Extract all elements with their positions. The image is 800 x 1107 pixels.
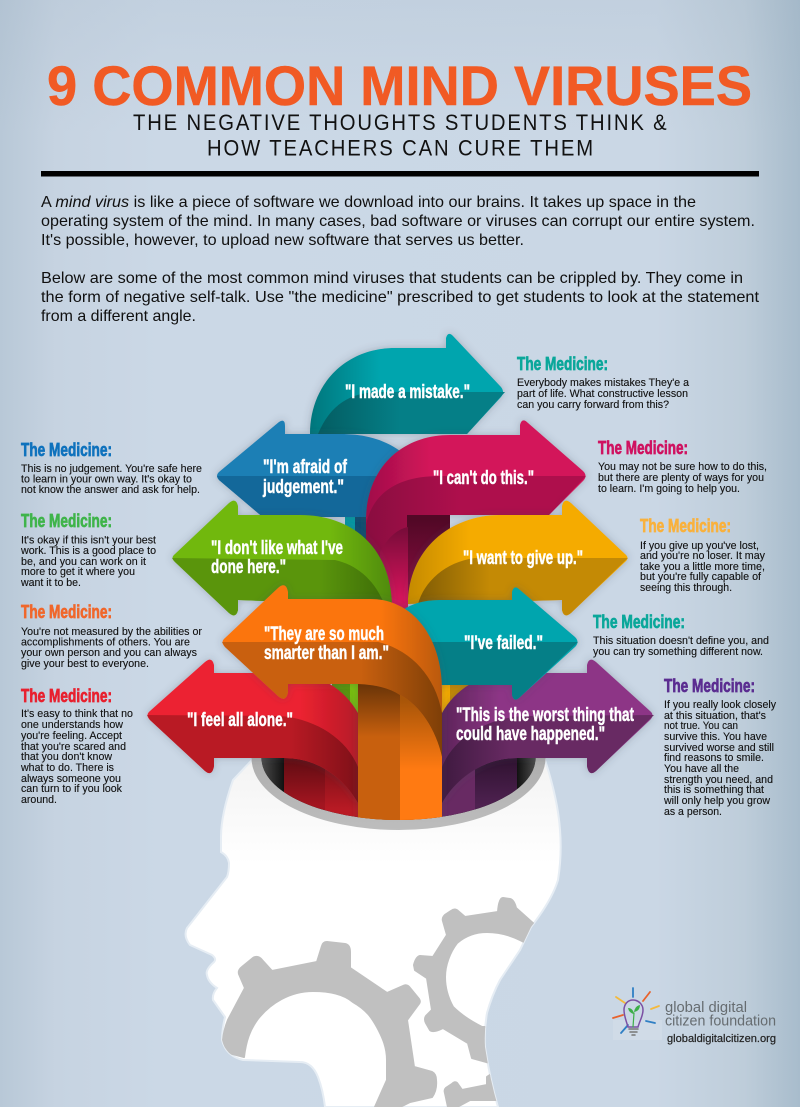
intro text block: A mind virus is like a piece of software we download into our brains. It takes up space in the xyxy=(41,194,696,211)
intro text block: operating system of the mind. In many cases, bad software or viruses can corrupt our entire system. xyxy=(41,213,755,230)
arrow: I feel all alone xyxy=(147,660,358,822)
medicine: This is the worst thing: survived worse and still xyxy=(664,742,774,754)
medicine: I feel all alone: you're feeling. Accept xyxy=(21,730,122,742)
medicine: This is the worst thing: strength you need, and xyxy=(664,774,773,786)
medicine: I can't do this: to learn. I'm going to help you. xyxy=(598,483,740,495)
arrow: I don't like what I've done here xyxy=(172,501,392,715)
medicine: I want to give up xyxy=(640,515,766,594)
medicine: I made a mistake: part of life. What constructive lesson xyxy=(517,388,688,400)
arrow: I want to give up xyxy=(408,501,628,715)
medicine: I can't do this: but there are plenty of ways for you xyxy=(598,472,764,484)
medicine: I'm afraid of judgement: This is no judgement. You're safe here xyxy=(21,463,202,475)
arrow: I'm afraid of judgement: judgement." xyxy=(262,477,344,498)
medicine: I feel all alone: one understands how xyxy=(21,719,123,731)
medicine: I made a mistake: Everybody makes mistakes They'e a xyxy=(517,377,689,389)
intro text block: Below are some of the most common mind viruses that students can be crippled by. They come in xyxy=(41,270,743,287)
medicine: I can't do this: The Medicine: xyxy=(598,437,688,458)
arrow: This is the worst thing: "This is the worst thing that xyxy=(456,705,634,726)
icon: upper gear xyxy=(414,898,535,1063)
arrow: They are so much smarter than I am: smarter than I am." xyxy=(264,643,389,664)
medicine: I'm afraid of judgement xyxy=(21,439,202,496)
medicine: I feel all alone: always someone you xyxy=(21,773,121,785)
arrow: I feel all alone: "I feel all alone." xyxy=(187,710,293,731)
medicine: This is the worst thing: as a person. xyxy=(664,806,722,818)
medicine: This is the worst thing: not true. You can xyxy=(664,720,738,732)
medicine: I don't like what I've done here: It's okay if this isn't your best xyxy=(21,535,156,547)
icon: large gear xyxy=(223,942,436,1107)
medicine: This is the worst thing: will only help you grow xyxy=(663,795,770,807)
medicine: This is the worst thing: You have all the xyxy=(664,763,739,775)
medicine: They are so much smarter: your own person and you can always xyxy=(21,647,197,659)
medicine: I'm afraid of judgement: to learn in your own way. It's okay to xyxy=(21,474,192,486)
medicine: I can't do this: You may not be sure how to do this, xyxy=(598,461,767,473)
medicine: I want to give up: seeing this through. xyxy=(640,582,732,594)
arrow: They are so much smarter than I am xyxy=(222,585,442,825)
medicine: I feel all alone: can turn to if you look xyxy=(21,783,123,795)
arrow: I'm afraid of judgement: "I'm afraid of xyxy=(263,457,347,478)
intro text block: It's possible, however, to upload new software that serves us better. xyxy=(41,232,524,249)
medicine: I feel all alone: It's easy to think that no xyxy=(21,708,133,720)
arrow: I've failed xyxy=(400,587,578,700)
medicine: I don't like what I've done here: The Medicine: xyxy=(21,510,112,531)
arrow: This is the worst thing xyxy=(442,660,654,822)
subtitle: HOW TEACHERS CAN CURE THEM xyxy=(207,136,593,161)
medicine: I want to give up: but you're fully capable of xyxy=(640,571,761,583)
medicine: This is the worst thing: at this situation, that's xyxy=(664,710,766,722)
arrow: I can't do this: "I can't do this." xyxy=(433,468,534,489)
medicine: This is the worst thing: this is something that xyxy=(664,784,764,796)
medicine: I can't do this xyxy=(598,437,767,495)
medicine: I want to give up: and you're no loser. It may xyxy=(640,550,766,562)
medicine: I want to give up: The Medicine: xyxy=(640,515,731,536)
medicine: I made a mistake: can you carry forward from this? xyxy=(517,399,669,411)
intro text block xyxy=(41,194,760,325)
medicine: They are so much smarter: You're not measured by the abilities or xyxy=(21,626,202,638)
medicine: I don't like what I've done here: want it to be. xyxy=(20,577,81,589)
medicine: I want to give up: take you a little more time, xyxy=(640,561,765,573)
medicine: I've failed: you can try something different now. xyxy=(593,646,763,658)
intro text block: from a different angle. xyxy=(41,308,196,325)
medicine: I made a mistake xyxy=(517,353,689,411)
subtitle: THE NEGATIVE THOUGHTS STUDENTS THINK & xyxy=(133,110,667,135)
medicine: This is the worst thing: If you really look closely xyxy=(664,699,777,711)
medicine: I feel all alone: what to do. There is xyxy=(20,762,114,774)
intro text block: the form of negative self-talk. Use "the medicine" prescribed to get students to look at the statement xyxy=(41,289,760,306)
medicine: I made a mistake: The Medicine: xyxy=(517,353,608,374)
medicine: I feel all alone: that you're scared and xyxy=(21,741,126,753)
brain opening xyxy=(252,686,546,830)
medicine: This is the worst thing xyxy=(663,675,777,818)
medicine: This is the worst thing: survive this. You have xyxy=(664,731,767,743)
subtitle xyxy=(133,110,667,161)
medicine: They are so much smarter: give your best to everyone. xyxy=(21,658,149,670)
medicine: They are so much smarter: The Medicine: xyxy=(21,601,112,622)
arrow: I made a mistake xyxy=(310,334,505,434)
logo: global digital citizen foundation: globaldigitalcitizen.org xyxy=(667,1033,776,1045)
logo: global digital citizen foundation xyxy=(613,988,776,1045)
medicine: I've failed: This situation doesn't define you, and xyxy=(593,635,769,647)
arrow: I don't like what I've done here: "I don't like what I've xyxy=(211,538,343,559)
medicine: This is the worst thing: The Medicine: xyxy=(664,675,755,696)
arrow: I'm afraid of judgement xyxy=(217,421,420,540)
arrow: I've failed: "I've failed." xyxy=(464,633,543,654)
icon: small bottom gear xyxy=(445,1075,505,1107)
logo: global digital citizen foundation: citizen foundation xyxy=(665,1012,776,1030)
medicine: I'm afraid of judgement: not know the answer and ask for help. xyxy=(21,484,200,496)
medicine: I feel all alone: The Medicine: xyxy=(21,685,112,706)
arrow: They are so much smarter than I am: "They are so much xyxy=(264,624,384,645)
head silhouette with gears xyxy=(186,760,561,1107)
medicine: I've failed xyxy=(593,611,769,658)
medicine: I'm afraid of judgement: The Medicine: xyxy=(21,439,112,460)
medicine: They are so much smarter: accomplishments of others. You are xyxy=(21,637,190,649)
medicine: They are so much smarter xyxy=(21,601,202,670)
arrow: I made a mistake: "I made a mistake." xyxy=(345,382,470,403)
medicine: I feel all alone: that you don't know xyxy=(21,751,112,763)
medicine: I feel all alone: around. xyxy=(21,794,57,806)
medicine: I don't like what I've done here: more to get it where you xyxy=(21,566,135,578)
arrow: I can't do this xyxy=(366,420,586,610)
medicine: I want to give up: If you give up you've lost, xyxy=(640,540,759,552)
medicine: This is the worst thing: find reasons to smile. xyxy=(664,752,764,764)
medicine: I feel all alone xyxy=(20,685,133,806)
logo: global digital citizen foundation: global digital xyxy=(665,999,747,1016)
medicine: I don't like what I've done here: be, and you can work on it xyxy=(21,556,146,568)
arrow: I want to give up: "I want to give up." xyxy=(463,548,583,569)
title: 9 COMMON MIND VIRUSES xyxy=(47,54,752,117)
icon: light bulb with rays xyxy=(613,988,659,1035)
medicine: I don't like what I've done here: work. This is a good place to xyxy=(20,545,156,557)
arrow: This is the worst thing: could have happened." xyxy=(456,724,605,745)
arrow: I don't like what I've done here: done here." xyxy=(211,557,286,578)
medicine: I've failed: The Medicine: xyxy=(593,611,685,632)
medicine: I don't like what I've done here xyxy=(20,510,156,589)
